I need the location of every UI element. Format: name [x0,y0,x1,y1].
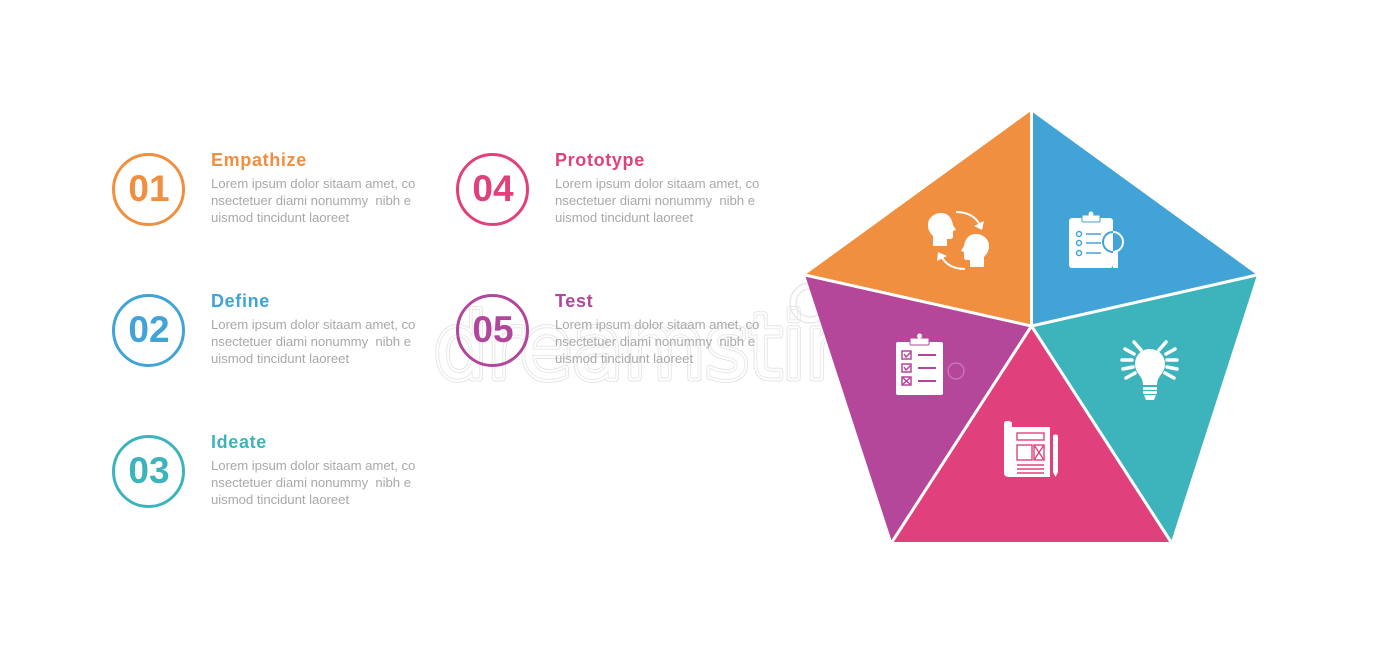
description 03: Lorem ipsum dolor sitaam amet, co nsectetuer diami nonummy nibh e uismod tincidunt laoreet [211,458,415,507]
item 01 Empathize [112,150,415,226]
segment: test purple [805,275,1031,542]
item 02 Define [112,291,415,367]
watermark registered mark [948,363,964,379]
watermark: dreamstime [434,295,939,400]
number 01: 01 [128,168,170,209]
number badge 03 [112,435,185,508]
number 03: 03 [128,450,170,491]
icon: clipboard with magnifier [1069,212,1123,268]
description 04: Lorem ipsum dolor sitaam amet, co nsectetuer diami nonummy nibh e uismod tincidunt laoreet [555,176,759,225]
heading Ideate: Ideate [211,432,267,452]
number 04: 04 [472,168,514,209]
segment: prototype pink [892,326,1171,542]
description 01: Lorem ipsum dolor sitaam amet, co nsectetuer diami nonummy nibh e uismod tincidunt laoreet [211,176,415,225]
item 03 Ideate [112,432,415,508]
description 05: Lorem ipsum dolor sitaam amet, co nsectetuer diami nonummy nibh e uismod tincidunt laoreet [555,317,759,366]
number 02: 02 [128,309,170,350]
watermark: dreamstime [434,295,939,400]
heading Empathize: Empathize [211,150,307,170]
heading Define: Define [211,291,270,311]
item 04 Prototype [456,150,759,226]
icon: two heads with arrows [928,212,989,269]
number badge 04 [456,153,529,226]
segment: empathize orange [805,111,1031,326]
icon: blueprint and pencil [1004,421,1058,477]
description 02: Lorem ipsum dolor sitaam amet, co nsectetuer diami nonummy nibh e uismod tincidunt laoreet [211,317,415,366]
heading Prototype: Prototype [555,150,645,170]
watermark: dreamstime [434,295,939,400]
number 05: 05 [472,309,514,350]
icon: light bulb [1122,342,1177,400]
segment: ideate teal [1031,275,1257,542]
icon: checklist clipboard [896,334,943,395]
number badge 02 [112,294,185,367]
item 05 Test [456,291,759,367]
segment: define blue [1031,111,1257,326]
number badge 05 [456,294,529,367]
number badge 01 [112,153,185,226]
heading Test: Test [555,291,593,311]
